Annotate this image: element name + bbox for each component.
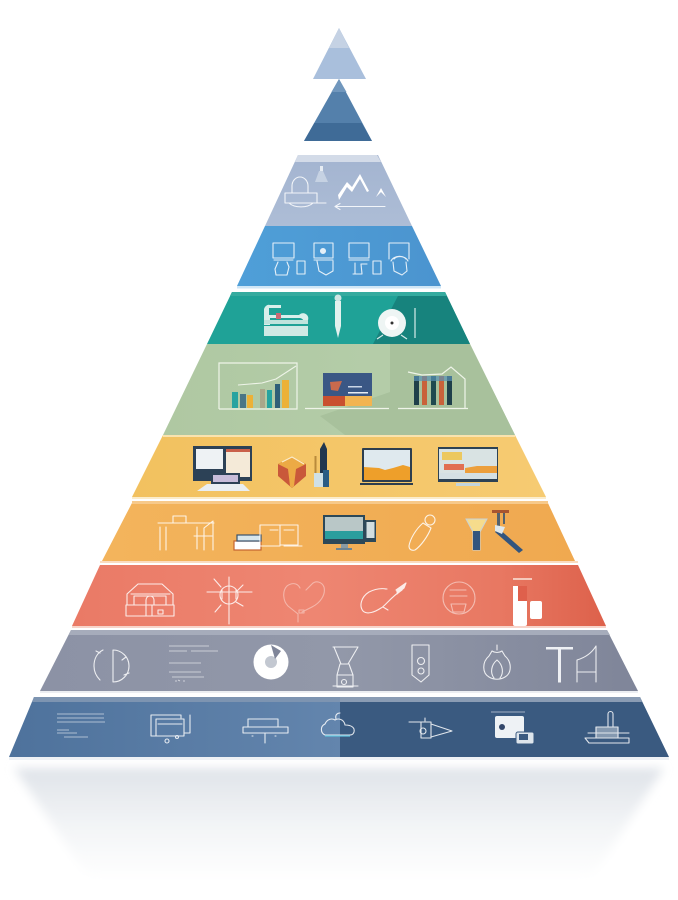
tier: navy bottom edge <box>9 757 669 760</box>
tier: navy objects <box>9 697 669 757</box>
tier: landscape <box>265 155 412 226</box>
icon: shield tag <box>412 645 429 682</box>
icon: dial circle <box>443 582 475 614</box>
icon: book screen <box>305 373 389 408</box>
tier: yellow bottom edge <box>132 497 546 499</box>
icon: bulb globe <box>484 645 510 679</box>
tier: orange bottom edge <box>100 561 578 563</box>
icon: monitor with hand 1 <box>273 243 305 275</box>
tier: orange objects <box>102 501 575 561</box>
icon: desk and chair <box>158 516 214 550</box>
icon: tray <box>243 719 288 743</box>
reflection shadow <box>14 768 664 880</box>
icon: desktop and laptop <box>193 446 252 491</box>
icon: padlock frame <box>285 177 326 207</box>
tier: blue bottom edge <box>237 286 441 288</box>
tier: gray bottom edge <box>40 691 638 693</box>
icon: cube shield <box>278 457 306 488</box>
icon: books <box>234 525 302 550</box>
icon: monitor website <box>438 447 498 486</box>
tier: yellow devices <box>132 435 546 497</box>
icon: cloud <box>321 713 354 736</box>
tier: green charts <box>163 344 515 435</box>
tier: gray objects <box>40 630 638 691</box>
icon: hourglass stand <box>333 647 358 687</box>
icon: pen <box>334 294 342 338</box>
icon: table and chair <box>546 646 596 682</box>
icon: pen and ink <box>314 442 329 487</box>
bar chart: growth <box>219 363 297 409</box>
icon: monitor with hand 4 <box>389 243 409 275</box>
icon: monitor and tablet <box>323 515 376 550</box>
tier: teal tools <box>207 292 470 344</box>
text block: small lines <box>169 646 218 682</box>
icon: brush and hammer <box>466 510 523 553</box>
icon: half globe <box>94 650 129 682</box>
icon: bottles <box>513 578 542 626</box>
tier: blue devices <box>237 226 441 286</box>
icon: carrot shape <box>409 515 435 550</box>
icon: pen loop <box>361 583 406 613</box>
icon: mountains <box>335 174 386 210</box>
icon: white disc <box>254 644 288 680</box>
icon: stapler <box>264 305 308 336</box>
icon: machine on tray <box>585 712 629 743</box>
text block: small lines <box>57 714 105 737</box>
icon: lightbulb <box>284 582 324 622</box>
icon: monitor with hand 3 <box>349 243 381 274</box>
bar chart: columns <box>398 367 468 408</box>
icon: building <box>126 584 174 616</box>
icon: white card device <box>491 712 534 744</box>
pyramid second: dark triangle <box>304 79 372 141</box>
icon: disc clock <box>377 308 415 339</box>
icon: stacked cards <box>151 715 190 743</box>
tier: red objects <box>72 565 606 626</box>
icon: sun <box>207 577 252 624</box>
pyramid top: light triangle <box>313 28 366 79</box>
icon: tag arrow <box>409 718 452 738</box>
tier: red bottom edge <box>72 626 606 628</box>
icon: small weight <box>315 166 328 182</box>
icon: laptop landscape <box>360 448 413 485</box>
icon: monitor with hand 2 <box>314 243 333 275</box>
